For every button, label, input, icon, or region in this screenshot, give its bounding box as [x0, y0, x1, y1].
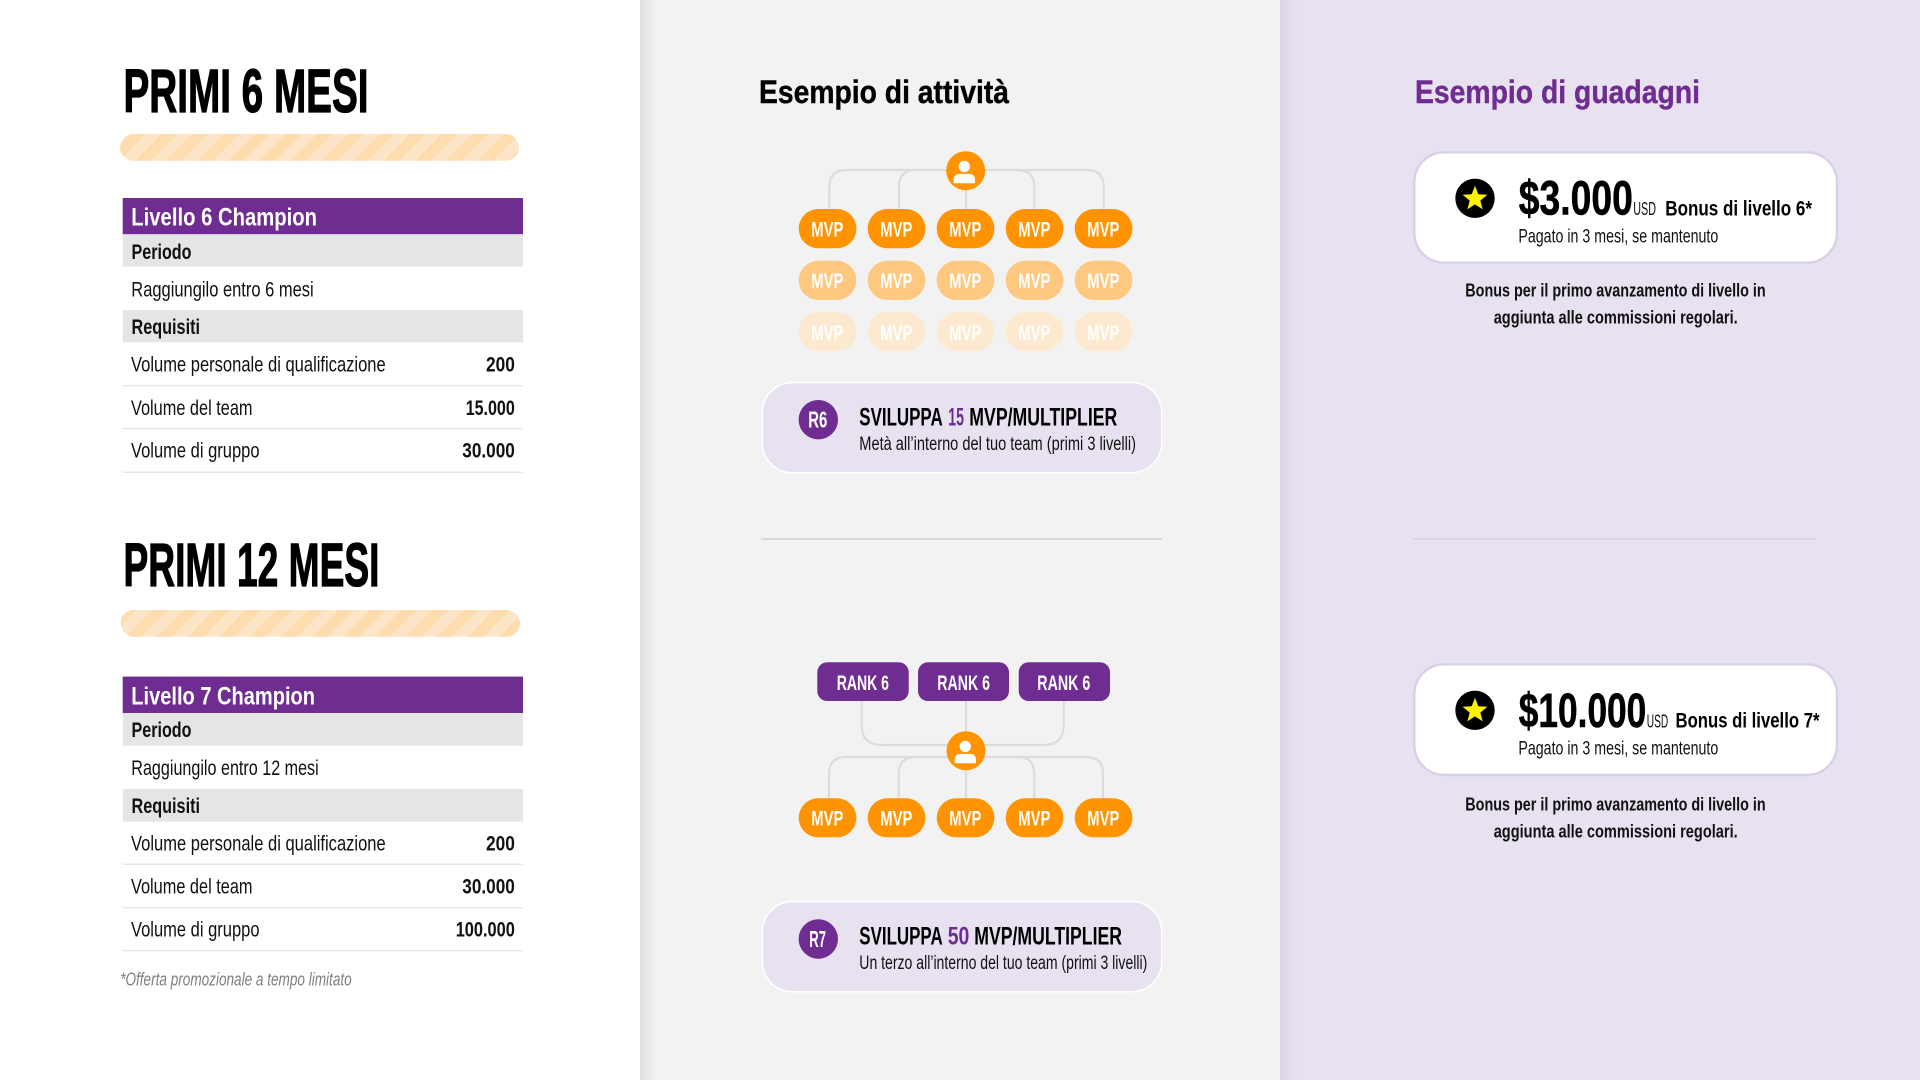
table: Livello 6 Champion: Requisiti	[132, 316, 200, 339]
rank 6 boxes: RANK 6	[837, 672, 889, 695]
table: Livello 6 Champion: Volume di gruppo	[131, 440, 260, 462]
MVP row: MVP	[949, 807, 981, 830]
badge: R6	[799, 400, 838, 439]
org chart: rank 7	[799, 662, 1132, 837]
MVP row: MVP	[811, 807, 843, 830]
striped progress bar	[120, 134, 519, 161]
MVP row 1	[799, 209, 1132, 248]
callout: R6	[762, 383, 1162, 473]
MVP row 1: MVP	[1087, 219, 1119, 242]
MVP row 1: MVP	[1018, 219, 1050, 242]
card: rank 6 bonus	[1414, 152, 1837, 263]
callout: R7: 50	[948, 922, 969, 950]
card: rank 6 bonus: $3.000	[1519, 173, 1633, 226]
table: Livello 6 Champion: Periodo	[132, 241, 192, 264]
MVP row 3: MVP	[1018, 322, 1050, 345]
card: rank 7 bonus: $10.000	[1519, 685, 1646, 738]
table: Livello 7 Champion: Requisiti	[132, 795, 200, 818]
icon: star	[1455, 691, 1495, 730]
note: rank 6 bonus	[1465, 280, 1766, 327]
MVP row 3: MVP	[880, 322, 912, 345]
rank 6 boxes: RANK 6	[1037, 672, 1090, 695]
badge: R7	[799, 919, 838, 959]
note: rank 6 bonus: Bonus per il primo avanzamento di livello in	[1465, 280, 1766, 301]
title: first 12 months: PRIMI 12 MESI	[124, 531, 380, 599]
icon: star	[1455, 179, 1495, 218]
MVP row 2	[799, 261, 1132, 300]
MVP row: MVP	[1087, 807, 1119, 830]
table: Livello 6 Champion: 30.000	[462, 440, 515, 462]
table: Livello 6 Champion: Volume del team	[131, 397, 252, 420]
table: Livello 7 Champion: Raggiungilo entro 12 mesi	[131, 757, 319, 780]
heading: earnings example: Esempio di guadagni	[1415, 74, 1700, 110]
callout: R7: MVP/MULTIPLIER	[974, 922, 1122, 950]
card: rank 7 bonus: USD	[1647, 711, 1668, 731]
callout: R7: SVILUPPA	[859, 922, 943, 950]
heading: activity example: Esempio di attività	[759, 74, 1010, 110]
MVP row 1: MVP	[949, 219, 981, 242]
MVP row 2: MVP	[1087, 270, 1119, 293]
MVP row 2: MVP	[811, 270, 843, 293]
table: Livello 7 Champion: Volume del team	[131, 876, 252, 898]
panel: requirements	[0, 0, 640, 1080]
table: Livello 6 Champion	[123, 198, 523, 473]
card: rank 7 bonus	[1414, 664, 1837, 775]
table: Livello 7 Champion: Periodo	[132, 719, 192, 742]
rank 6 boxes	[817, 662, 1110, 701]
table: Livello 6 Champion: Raggiungilo entro 6 mesi	[131, 278, 314, 302]
MVP row: MVP	[1018, 807, 1050, 830]
striped progress bar	[121, 610, 520, 637]
card: rank 6 bonus: USD	[1633, 199, 1656, 219]
table: Livello 6 Champion: 15.000	[466, 397, 515, 420]
card: rank 6 bonus: Bonus di livello 6*	[1665, 197, 1813, 220]
card: rank 7 bonus: Bonus di livello 7*	[1676, 709, 1820, 732]
note: rank 7 bonus	[1465, 794, 1766, 842]
callout: R6: SVILUPPA	[859, 404, 943, 432]
org chart: rank 6	[799, 151, 1132, 351]
note: rank 7 bonus: aggiunta alle commissioni regolari.	[1494, 820, 1738, 842]
icon: person	[946, 731, 986, 770]
MVP row 2: MVP	[880, 270, 912, 293]
table: Livello 7 Champion	[123, 677, 523, 951]
card: rank 6 bonus: Pagato in 3 mesi, se mantenuto	[1518, 227, 1718, 248]
table: Livello 6 Champion: 200	[486, 354, 515, 376]
callout: R6: Metà all’interno del tuo team (primi 3 livelli)	[859, 434, 1136, 455]
callout: R7: Un terzo all’interno del tuo team (primi 3 livelli)	[859, 953, 1147, 974]
table: Livello 7 Champion: 30.000	[462, 876, 515, 898]
callout: R6: 15	[948, 404, 964, 432]
rank 6 boxes: RANK 6	[937, 672, 990, 695]
table: Livello 6 Champion: Livello 6 Champion	[131, 203, 317, 231]
badge: R7: R7	[809, 926, 826, 952]
note: rank 6 bonus: aggiunta alle commissioni regolari.	[1494, 306, 1738, 327]
callout: R6: MVP/MULTIPLIER	[969, 404, 1117, 432]
callout: R7	[762, 902, 1162, 992]
card: rank 7 bonus: Pagato in 3 mesi, se mantenuto	[1518, 739, 1718, 760]
MVP row 3: MVP	[811, 322, 843, 345]
MVP row 2: MVP	[1018, 270, 1050, 293]
note: rank 7 bonus: Bonus per il primo avanzamento di livello in	[1465, 794, 1766, 815]
footnote: *Offerta promozionale a tempo limitato	[120, 970, 352, 990]
MVP row 1: MVP	[880, 219, 912, 242]
panel: activity example	[640, 0, 1280, 1080]
MVP row 2: MVP	[949, 270, 981, 293]
MVP row 1: MVP	[811, 219, 843, 242]
MVP row 3	[799, 312, 1132, 351]
table: Livello 7 Champion: Livello 7 Champion	[131, 682, 315, 710]
badge: R6: R6	[808, 407, 827, 433]
table: Livello 7 Champion: 200	[486, 832, 515, 855]
table: Livello 7 Champion: 100.000	[456, 918, 515, 942]
icon: person	[946, 151, 985, 190]
panel: earnings example	[1280, 0, 1920, 1080]
table: Livello 7 Champion: Volume di gruppo	[131, 918, 260, 942]
table: Livello 7 Champion: Volume personale di qualificazione	[131, 832, 386, 855]
MVP row 3: MVP	[949, 322, 981, 345]
MVP row	[799, 798, 1132, 837]
table: Livello 6 Champion: Volume personale di qualificazione	[131, 354, 386, 376]
MVP row: MVP	[880, 807, 912, 830]
title: first 6 months: PRIMI 6 MESI	[124, 57, 368, 125]
MVP row 3: MVP	[1087, 322, 1119, 345]
